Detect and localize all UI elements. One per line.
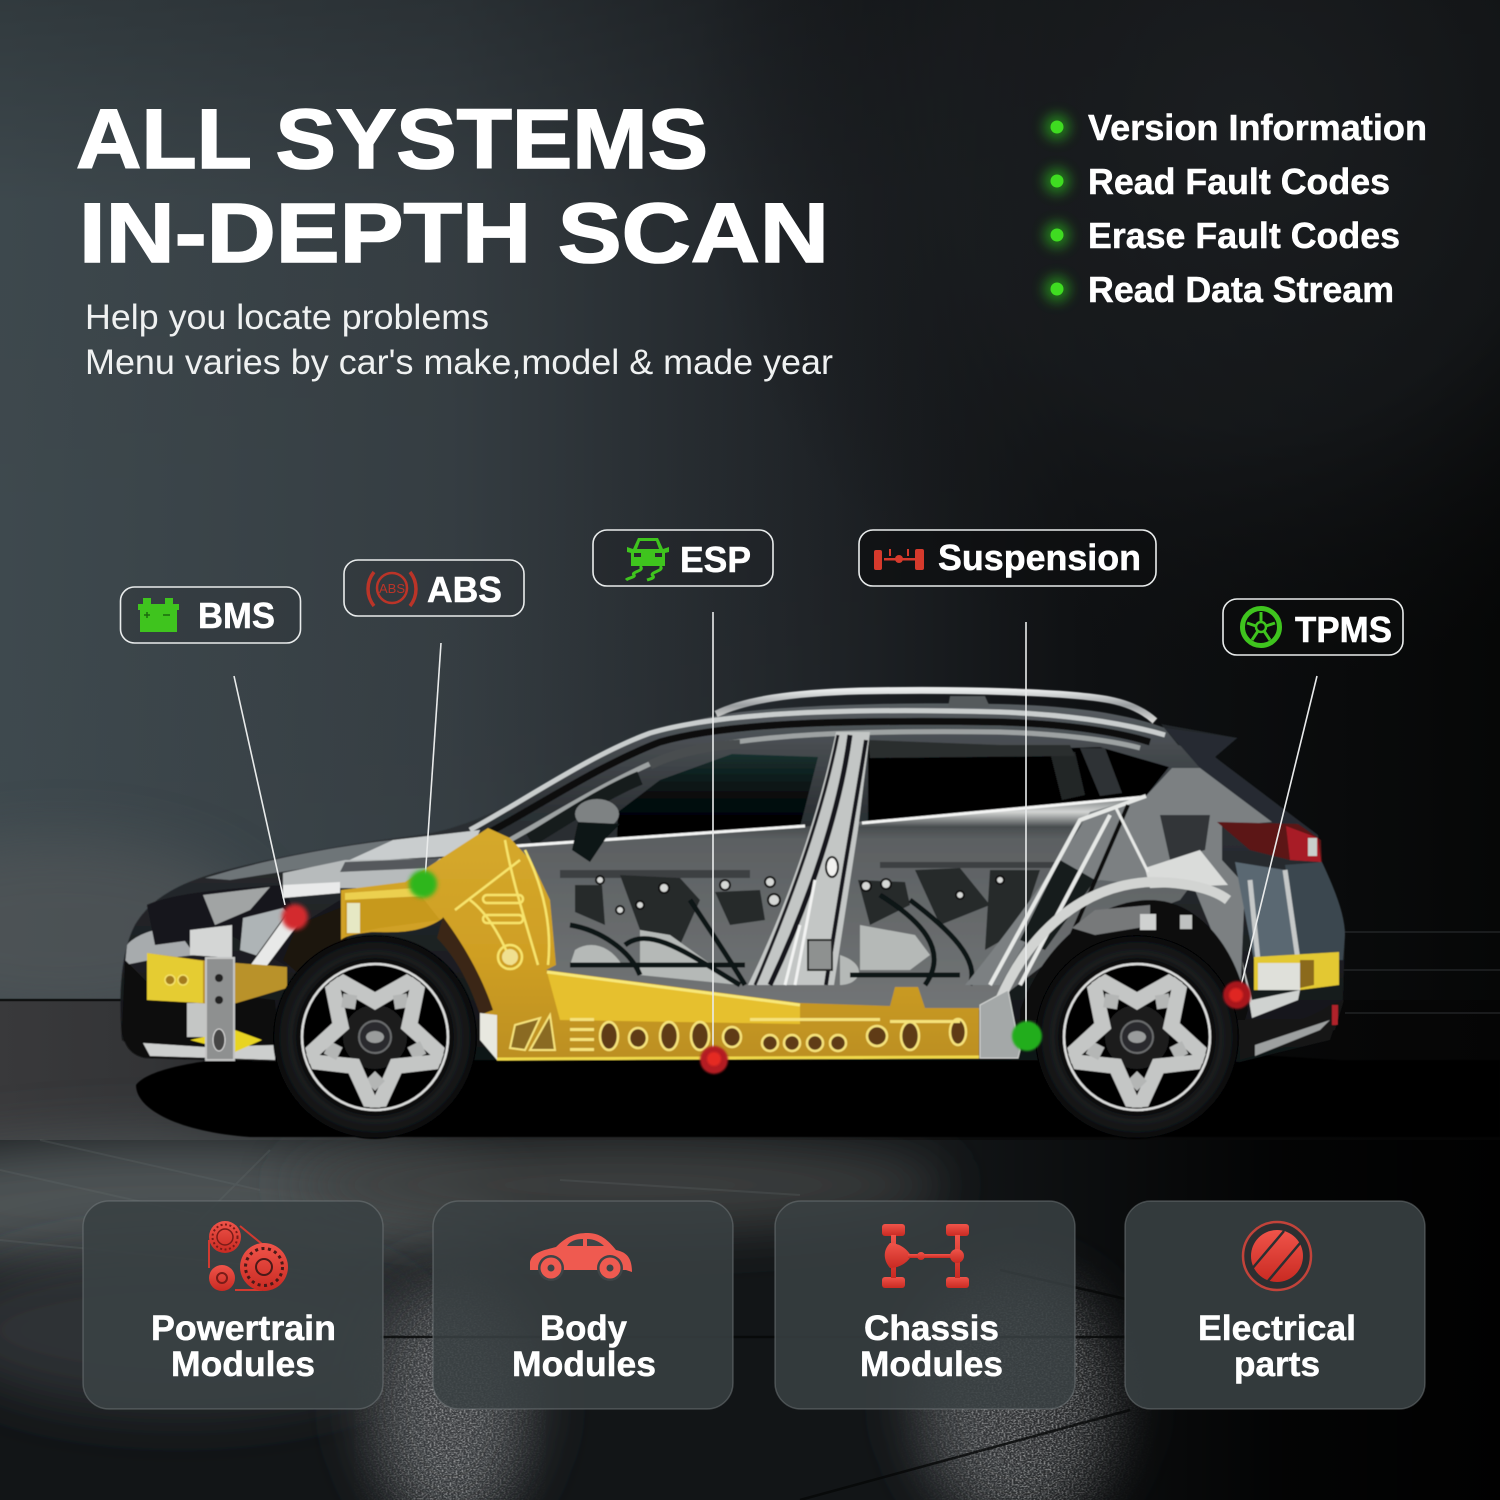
dark rear roof edge xyxy=(1165,728,1318,835)
icon: car xyxy=(530,1233,632,1281)
label: ESP: ESP xyxy=(680,539,751,580)
marker dots xyxy=(282,870,1251,1074)
side windows xyxy=(617,740,1169,838)
hood highlights xyxy=(125,830,480,965)
bullet: Read Fault Codes: Read Fault Codes xyxy=(1088,161,1390,202)
panel: Chassis Modules: Modules xyxy=(860,1344,1003,1384)
feature bullet list xyxy=(1044,107,1427,310)
pointer lines xyxy=(234,612,1317,1055)
above-wheel box xyxy=(345,888,440,935)
subtitle text: Help you locate problems xyxy=(85,297,489,337)
body silhouette xyxy=(121,703,1345,1062)
wheel arch band xyxy=(1000,882,1228,1000)
label: ABS: ABS xyxy=(427,569,502,610)
yellow frame: rear beam xyxy=(1254,952,1339,990)
label: TPMS: TPMS xyxy=(1295,609,1392,650)
sill slots xyxy=(570,1018,960,1051)
marker: ABS xyxy=(409,870,437,898)
rear bumper lower xyxy=(1240,1000,1344,1060)
tail light xyxy=(1217,822,1322,862)
sill highlight xyxy=(547,972,800,1024)
icon: chassis xyxy=(882,1224,969,1288)
side mirror xyxy=(572,799,620,862)
wheel well xyxy=(1020,900,1248,1020)
panel: Powertrain Modules xyxy=(83,1201,383,1409)
label: ESP xyxy=(593,530,773,586)
bullet: Version Information: Version Information xyxy=(1088,107,1427,148)
panel: Powertrain Modules: Modules xyxy=(171,1344,315,1384)
icon: tire xyxy=(1242,608,1280,646)
asphalt speckle xyxy=(390,1300,510,1500)
panel: Electrical parts: parts xyxy=(1234,1344,1320,1384)
belt line xyxy=(500,797,1144,847)
icon: electrical disc xyxy=(1243,1222,1311,1290)
dark door cavities xyxy=(560,862,1100,950)
panel: Body Modules: Body xyxy=(540,1308,627,1348)
icon: belt drive xyxy=(209,1221,288,1291)
bullet: Read Data Stream: Read Data Stream xyxy=(1088,269,1394,310)
marker: ESP xyxy=(700,1046,728,1074)
subtitle text xyxy=(85,297,833,382)
floor xyxy=(0,932,1500,1500)
quarter glass frame xyxy=(965,768,1272,1000)
background wall xyxy=(0,0,1500,1020)
panel: Body Modules xyxy=(433,1201,733,1409)
front wheel xyxy=(273,935,477,1139)
panel: Powertrain Modules: Powertrain xyxy=(151,1308,336,1348)
dark wheel arch patch xyxy=(437,917,493,1015)
panel: Body Modules: Modules xyxy=(512,1344,656,1384)
title: IN-DEPTH SCAN xyxy=(79,186,829,280)
spoiler xyxy=(1161,724,1238,752)
icon: ABS warning xyxy=(368,572,416,606)
title: ALL SYSTEMS xyxy=(76,92,708,186)
front bumper lower xyxy=(122,960,280,1062)
label: BMS: BMS xyxy=(198,595,275,636)
ground shadow xyxy=(136,1055,1500,1137)
door bolt holes xyxy=(596,866,1004,940)
C pillar and rear quarter structure xyxy=(965,728,1345,1020)
panel: Chassis Modules: Chassis xyxy=(864,1308,999,1348)
label: Suspension xyxy=(859,530,1156,586)
rear lower bracket xyxy=(980,990,1020,1058)
subtitle text: Menu varies by car's make,model & made year xyxy=(85,342,833,382)
label: BMS xyxy=(120,587,300,643)
blue grey outer skin xyxy=(1235,862,1300,965)
icon: skidding car xyxy=(626,538,669,580)
panel: Electrical parts xyxy=(1125,1201,1425,1409)
rear wheel xyxy=(1035,935,1239,1139)
yellow frame: front beam xyxy=(147,953,287,1005)
front bracket xyxy=(206,958,234,1060)
bright shelf xyxy=(1145,850,1228,888)
panel: Electrical parts: Electrical xyxy=(1198,1308,1356,1348)
B pillar xyxy=(748,732,870,985)
marker: BMS xyxy=(282,904,308,930)
panel: Chassis Modules xyxy=(775,1201,1075,1409)
car illustration xyxy=(121,690,1500,1139)
icon: suspension xyxy=(874,549,924,570)
dark interior spots xyxy=(1160,815,1210,860)
icon: battery xyxy=(138,598,179,632)
pillar lines xyxy=(990,796,1146,985)
door structure xyxy=(500,797,1210,1010)
label: ABS xyxy=(344,560,524,616)
bullet: Erase Fault Codes: Erase Fault Codes xyxy=(1088,215,1400,256)
label: TPMS xyxy=(1223,599,1403,655)
roof rail xyxy=(716,690,1155,721)
light door panels xyxy=(570,925,930,985)
headlight and engine bay xyxy=(147,882,347,975)
title xyxy=(76,92,829,280)
roof and A-pillar bands xyxy=(470,711,1165,840)
pillar outline highlights xyxy=(455,840,549,969)
marker: TPMS xyxy=(1223,981,1251,1009)
marker: Suspension xyxy=(1012,1021,1042,1051)
icon: ABS warning: ABS xyxy=(379,581,405,596)
sill holes xyxy=(600,1019,966,1051)
dark door ribs xyxy=(570,895,972,985)
yellow frame: cowl, hinge pillar and sill xyxy=(341,828,979,1060)
label: Suspension: Suspension xyxy=(938,537,1141,578)
